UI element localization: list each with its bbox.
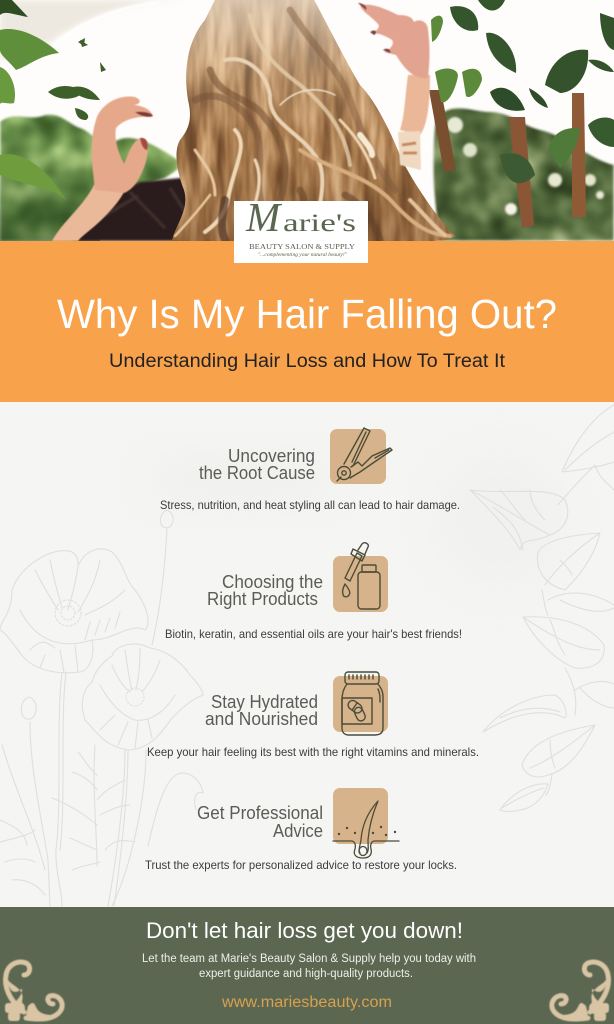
logo wordmark: M <box>245 194 283 240</box>
step 1: uncovering the root cause <box>160 428 460 512</box>
logo wordmark <box>245 194 356 240</box>
right foliage <box>429 0 614 241</box>
dress <box>72 176 186 241</box>
title: Why Is My Hair Falling Out? <box>57 291 557 337</box>
logo tagline: "...complementing your natural beauty!" <box>258 253 348 258</box>
footer heading: Don't let hair loss get you down! <box>146 918 463 943</box>
heading: Get Professional <box>197 803 323 823</box>
heading: Advice <box>273 821 323 841</box>
hair <box>160 0 460 241</box>
logo name line: BEAUTY SALON & SUPPLY <box>249 242 356 251</box>
botanical line art: poppies <box>0 510 203 906</box>
ornament: right corner scroll <box>552 962 609 1021</box>
icon: hair follicle <box>333 788 399 858</box>
photo: woman with long wavy blonde hair among plants <box>0 0 614 241</box>
description: Keep your hair feeling its best with the right vitamins and minerals. <box>147 745 479 759</box>
ornament: left corner scroll <box>5 962 62 1021</box>
footer body text <box>142 953 476 980</box>
heading: the Root Cause <box>199 463 315 483</box>
step 3: stay hydrated and nourished <box>147 672 479 759</box>
logo wordmark: arie's <box>283 210 356 237</box>
heading: Stay Hydrated <box>211 692 318 712</box>
heading: and Nourished <box>205 709 318 729</box>
footer body text: expert guidance and high-quality products. <box>199 968 413 980</box>
left foliage <box>0 0 184 241</box>
heading <box>197 803 323 841</box>
step 2: choosing the right products <box>165 543 462 641</box>
botanical line art: vine leaves <box>470 405 614 812</box>
icon: dropper and bottle <box>333 543 388 612</box>
description: Biotin, keratin, and essential oils are your hair's best friends! <box>165 627 462 641</box>
heading <box>205 692 318 729</box>
icon: vitamin jar <box>333 672 388 735</box>
description: Stress, nutrition, and heat styling all can lead to hair damage. <box>160 498 460 512</box>
heading: Uncovering <box>228 446 315 466</box>
right arm, hand and lace sleeve <box>358 3 430 170</box>
footer body text: Let the team at Marie's Beauty Salon & Supply help you today with <box>142 953 476 965</box>
logo <box>234 194 368 263</box>
footer panel <box>0 907 614 1024</box>
orange title band <box>0 241 614 402</box>
heading: Right Products <box>207 589 318 609</box>
page background <box>0 402 614 908</box>
description: Trust the experts for personalized advice to restore your locks. <box>145 858 457 872</box>
website link: www.mariesbeauty.com <box>221 994 392 1011</box>
heading: Choosing the <box>222 572 323 592</box>
heading <box>207 572 323 609</box>
heading <box>199 446 315 483</box>
left arm and hand <box>52 97 153 241</box>
icon: flat iron <box>330 428 392 484</box>
step 4: get professional advice <box>145 788 457 872</box>
subtitle: Understanding Hair Loss and How To Treat It <box>109 351 506 372</box>
